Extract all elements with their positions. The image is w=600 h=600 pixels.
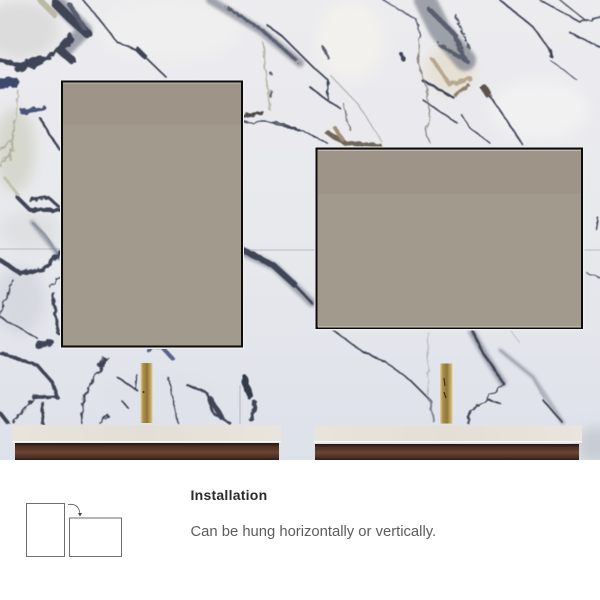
vanity left xyxy=(12,425,281,460)
heading: Installation xyxy=(190,487,267,503)
mirror: vertical xyxy=(60,79,244,349)
vanity right xyxy=(314,426,582,460)
description: Can be hung horizontally or vertically. xyxy=(190,524,436,540)
mirror: horizontal xyxy=(314,146,584,330)
marble wall photo with mirrors and vanities xyxy=(0,0,600,460)
soft tonal clouds in the marble xyxy=(0,0,600,463)
installation icon xyxy=(26,503,122,557)
faucet left xyxy=(140,363,152,423)
faucet right xyxy=(440,364,452,424)
marble veins xyxy=(0,0,600,423)
tile seams xyxy=(0,249,600,424)
